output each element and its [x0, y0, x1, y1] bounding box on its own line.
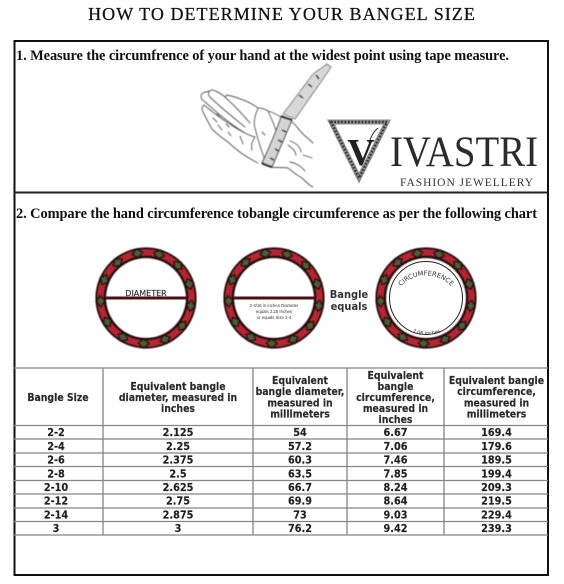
column: diameter inches: 3 — [175, 522, 181, 535]
table header — [27, 370, 544, 426]
logo wordmark: IVASTRI — [390, 129, 538, 176]
column: circumference millimeters: 229.4 — [481, 508, 512, 522]
size note: 2-4/16 in inches Diameter — [250, 303, 299, 308]
column: diameter inches: 2.125 — [163, 426, 194, 439]
table header: measured in — [267, 398, 333, 410]
column: circumference millimeters: 209.3 — [481, 481, 512, 494]
table header: Equivalent — [272, 375, 329, 387]
table header: inches — [379, 414, 413, 426]
table header: Equivalent bangle — [449, 375, 544, 387]
column: bangle size: 2-10 — [44, 481, 68, 494]
table header: circumference, — [457, 386, 536, 398]
table header: inches — [161, 403, 195, 415]
column: diameter millimeters: 66.7 — [288, 481, 312, 494]
label: bangle equals: equals — [331, 300, 368, 313]
circumference label: CIRCUMFERENCE — [398, 270, 454, 286]
column: diameter inches: 2.625 — [163, 481, 194, 494]
logo triangle emblem: V — [347, 132, 375, 174]
column: circumference millimeters: 169.4 — [481, 426, 512, 439]
table header: Bangle Size — [27, 392, 89, 404]
column: bangle size: 2-6 — [47, 454, 65, 466]
column: circumference inches: 7.46 — [384, 454, 408, 466]
logo triangle emblem — [331, 122, 387, 178]
column: circumference inches: 8.24 — [384, 481, 408, 494]
column: circumference millimeters: 199.4 — [481, 468, 512, 480]
column: bangle size: 2-8 — [47, 468, 65, 480]
column: diameter millimeters: 57.2 — [288, 440, 312, 453]
logo tagline: FASHION JEWELLERY — [400, 177, 534, 189]
logo: Vivastri — [331, 122, 538, 189]
table header: millimeters — [270, 408, 330, 420]
table header: diameter, measured in — [119, 392, 237, 404]
column: circumference inches: 8.64 — [384, 494, 408, 508]
table header: Equivalent — [367, 370, 424, 382]
table header: circumference, — [356, 392, 435, 404]
column: diameter inches: 2.75 — [166, 494, 190, 508]
diameter label: DIAMETER — [125, 289, 167, 298]
size note: or equals Size 2-4 — [257, 315, 292, 320]
column: diameter inches: 2.5 — [169, 468, 187, 480]
column: circumference inches: 6.67 — [384, 426, 407, 439]
column: bangle size: 2-12 — [44, 494, 68, 508]
circumference value: 7.06 inches — [414, 328, 440, 335]
step 2 text: 2. Compare the hand circumference tobangle circumference as per the following chart — [16, 206, 537, 222]
column: diameter millimeters: 69.9 — [288, 494, 312, 508]
column: bangle size: 2-14 — [44, 508, 68, 522]
diagram: bangle size 2-4 — [224, 248, 324, 348]
diagram: bangle diameter — [96, 248, 196, 348]
column: diameter millimeters: 60.3 — [288, 454, 312, 466]
column: circumference millimeters: 179.6 — [481, 440, 512, 453]
table header: measured in — [363, 403, 428, 415]
column: circumference millimeters: 219.5 — [481, 494, 512, 508]
column: bangle size: 3 — [53, 522, 59, 535]
column: circumference inches: 7.85 — [384, 468, 408, 480]
table header: Equivalent bangle — [130, 381, 226, 393]
column: diameter millimeters: 54 — [293, 426, 307, 439]
panel divider between steps — [14, 192, 548, 194]
column: bangle size: 2-2 — [47, 426, 65, 439]
label: bangle equals: Bangle — [330, 288, 369, 301]
table header: measured in — [464, 398, 529, 410]
column: bangle size: 2-4 — [47, 440, 65, 453]
column: circumference inches: 9.03 — [384, 508, 407, 522]
size note: equals 2.25 Inches — [256, 309, 292, 314]
column: diameter inches: 2.25 — [166, 440, 190, 453]
table: bangle size chart — [14, 368, 548, 535]
column: diameter millimeters: 76.2 — [288, 522, 312, 535]
column: diameter millimeters: 63.5 — [288, 468, 312, 480]
step 1 text: 1. Measure the circumfrence of your hand at the widest point using tape measure. — [16, 48, 509, 64]
title: HOW TO DETERMINE YOUR BANGEL SIZE — [88, 4, 476, 24]
table header: bangle — [378, 381, 413, 393]
column: circumference millimeters: 239.3 — [481, 522, 512, 535]
column: circumference millimeters: 189.5 — [481, 454, 512, 466]
table grid — [14, 368, 548, 535]
table header: millimeters — [467, 408, 527, 420]
column: diameter millimeters: 73 — [293, 508, 307, 522]
column: circumference inches: 7.06 — [384, 440, 408, 453]
column: diameter inches: 2.875 — [163, 508, 194, 522]
column: diameter inches: 2.375 — [163, 454, 194, 466]
diagram: bangle circumference — [374, 246, 478, 350]
icon: hand with tape measure — [201, 64, 331, 187]
table header: bangle diameter, — [256, 386, 344, 398]
column: circumference inches: 9.42 — [384, 522, 407, 535]
